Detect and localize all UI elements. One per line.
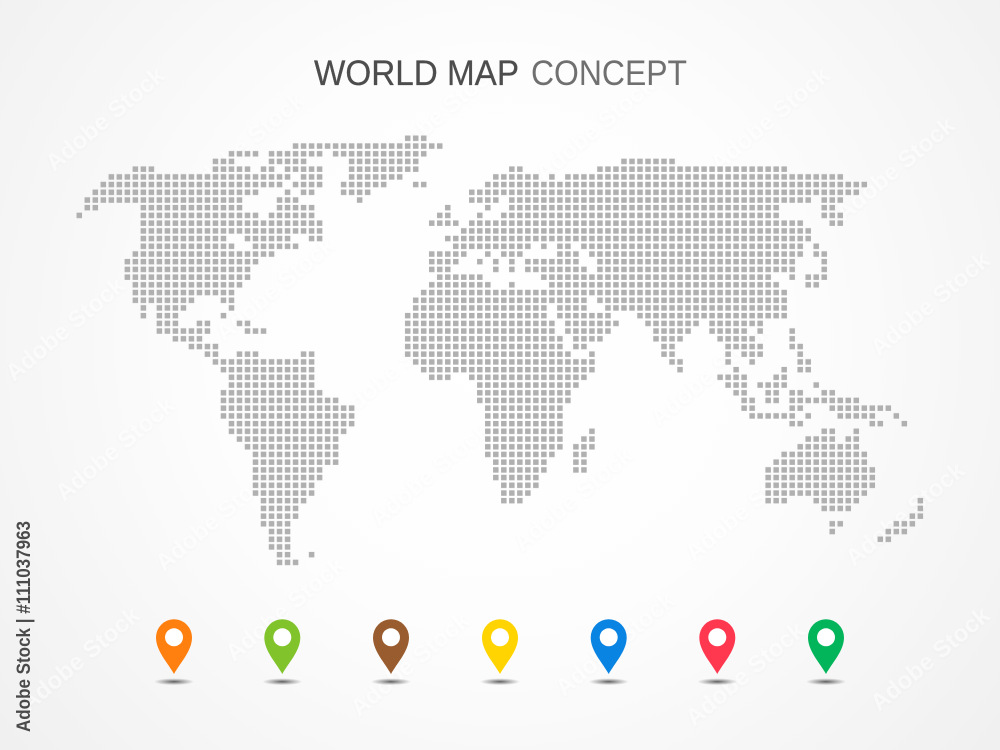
watermarks: Adobe Stock [680, 451, 811, 567]
pin: brown [371, 619, 411, 685]
watermarks: Adobe Stock [705, 61, 836, 177]
watermarks: Adobe Stock [150, 461, 281, 577]
watermarks: Adobe Stock [840, 456, 971, 572]
watermarks: Adobe Stock [865, 246, 996, 362]
watermarks: Adobe Stock [210, 231, 341, 347]
watermarks: Adobe Stock [365, 416, 496, 532]
title light part: CONCEPT [531, 54, 687, 93]
watermarks: Adobe Stock [330, 311, 461, 427]
dotted world map [77, 138, 926, 562]
watermarks: Adobe Stock [15, 601, 146, 717]
title bold part: WORLD MAP [314, 54, 519, 93]
pin: red [697, 619, 737, 685]
watermarks: Adobe Stock [645, 316, 776, 432]
watermarks: Adobe Stock [830, 111, 961, 227]
watermarks: Adobe Stock [220, 551, 351, 667]
watermarks: Adobe Stock [865, 601, 996, 717]
pin: yellow [480, 619, 520, 685]
watermarks: Adobe Stock [550, 586, 681, 702]
watermarks: Adobe Stock [680, 616, 811, 732]
pin: green [262, 619, 302, 685]
pin: orange [154, 619, 194, 685]
watermarks: Adobe Stock [40, 61, 171, 177]
stock id side text: Adobe Stock | #111037963 [14, 521, 35, 732]
watermarks: Adobe Stock [50, 391, 181, 507]
watermarks: Adobe Stock [0, 271, 131, 387]
title [314, 54, 687, 93]
pin: blue [589, 619, 629, 685]
watermarks: Adobe Stock [530, 71, 661, 187]
pin: emerald [806, 619, 846, 685]
watermarks: Adobe Stock [508, 441, 639, 557]
watermarks: Adobe Stock [180, 86, 311, 202]
map pins row [154, 619, 846, 685]
watermarks: Adobe Stock [345, 606, 476, 722]
watermarks: Adobe Stock [375, 56, 506, 172]
